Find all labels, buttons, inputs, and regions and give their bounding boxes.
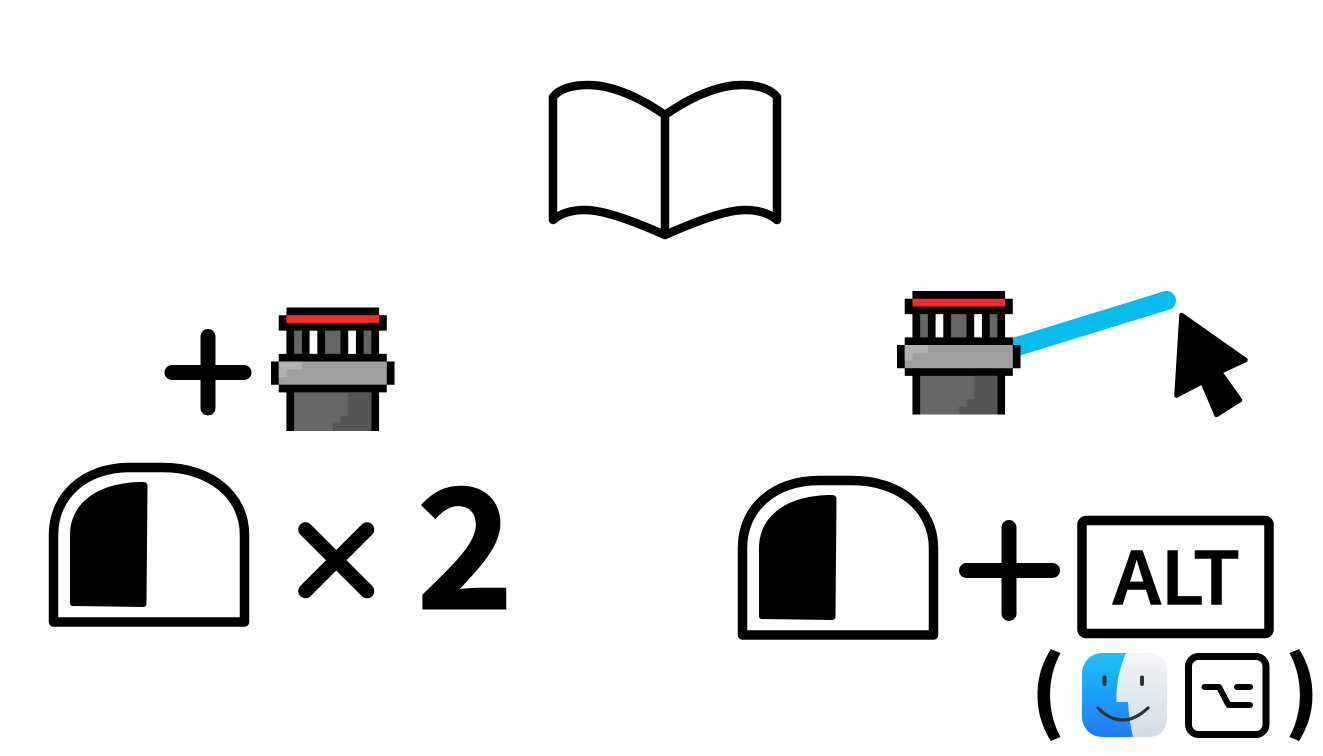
icon: mouse cursor xyxy=(1176,315,1246,415)
icon: pixel pipe, left group xyxy=(271,308,395,431)
text: opening parenthesis: ( xyxy=(1030,622,1066,749)
icon: pixel pipe, right group xyxy=(897,291,1021,415)
icon: multiply sign xyxy=(306,530,367,591)
icon: open book xyxy=(553,85,777,235)
icon: plus sign, left group xyxy=(172,336,244,408)
icon: plus sign, right group xyxy=(966,528,1052,614)
icon: blue drag line xyxy=(1012,300,1166,348)
text: closing parenthesis: ) xyxy=(1284,622,1320,749)
icon: mouse with left button, right group xyxy=(742,480,934,635)
key: ALT: ALT xyxy=(1113,520,1240,625)
key: ALT xyxy=(1082,520,1269,634)
key: Option symbol xyxy=(1188,656,1266,734)
text: number 2: 2 xyxy=(416,416,514,658)
icon: mouse with left button, left group xyxy=(54,468,244,622)
icon: Finder logo xyxy=(1082,653,1167,737)
